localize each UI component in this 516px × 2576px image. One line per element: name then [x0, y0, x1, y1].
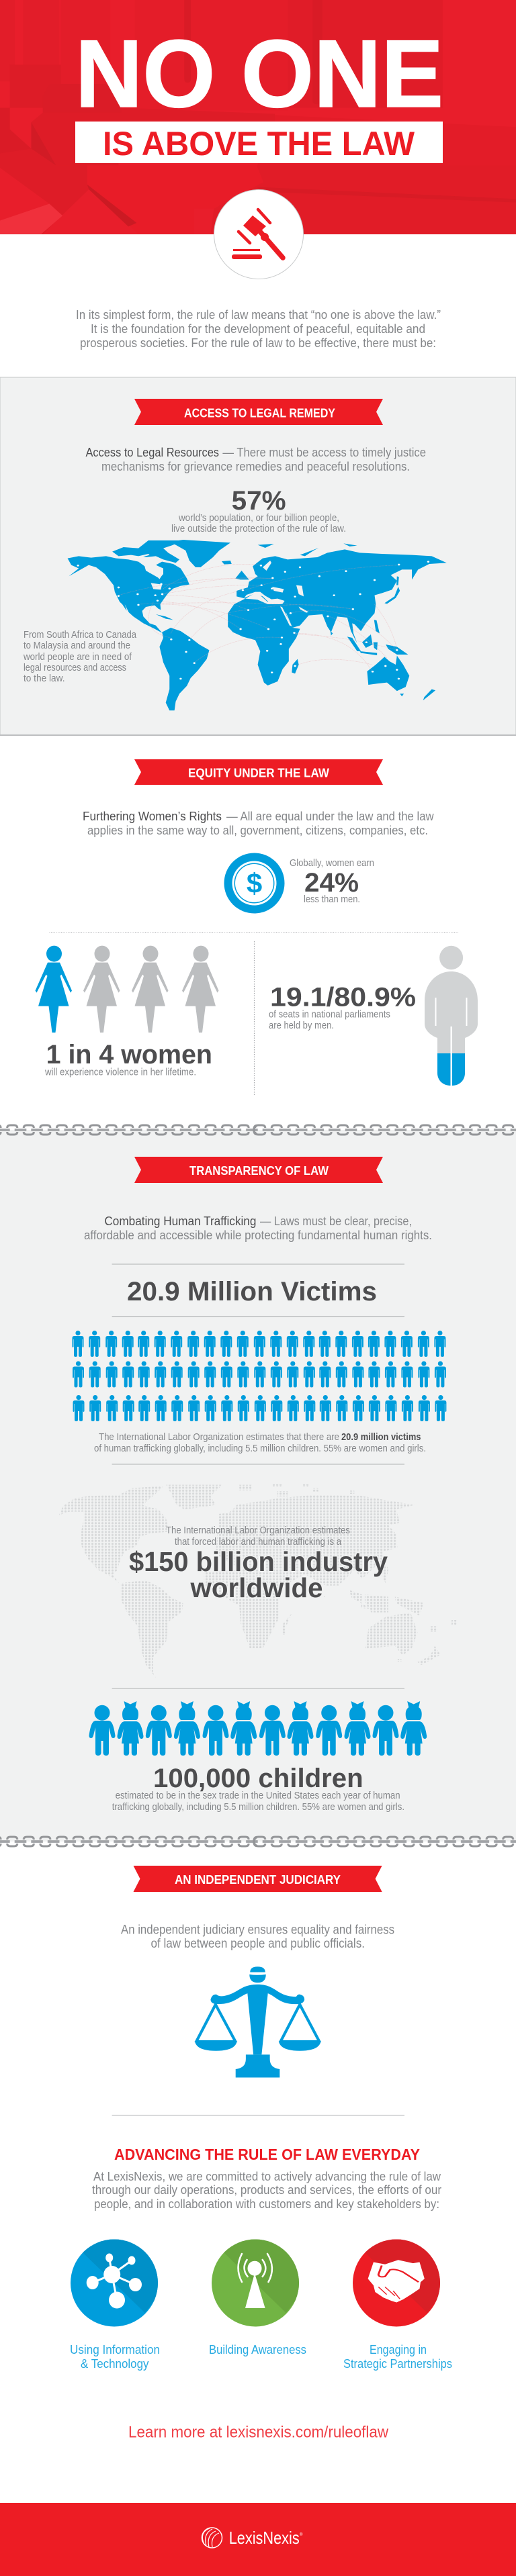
body text: through our daily operations, products and services, the efforts of our [92, 2183, 441, 2197]
section text [84, 1214, 432, 1242]
chain divider top [0, 1124, 516, 1136]
icon: handshake [353, 2240, 440, 2327]
statistic: 57%: 57% [232, 486, 286, 516]
icon: man figure [425, 946, 478, 1086]
caption: victims [94, 1432, 426, 1454]
callout: from South Africa to Canada [23, 630, 137, 684]
label: engaging in strategic partnerships [343, 2343, 452, 2371]
body text [92, 2169, 441, 2211]
heading: ADVANCING THE RULE OF LAW EVERYDAY [114, 2146, 420, 2163]
label: engaging in strategic partnerships: Strategic Partnerships [343, 2357, 452, 2371]
intro text [76, 308, 441, 350]
logo: LexisNexis: ® [300, 2532, 303, 2537]
chain divider bottom [0, 1835, 516, 1848]
label: using information and technology: Using Information [70, 2343, 160, 2356]
statistic: 57% [171, 486, 346, 534]
section text: mechanisms for grievance remedies and peaceful resolutions. [101, 460, 410, 473]
statistic: 100,000 children: 100,000 children [153, 1764, 363, 1793]
text: 150 billion industry: . [324, 1594, 325, 1599]
label: engaging in strategic partnerships: Engaging in [370, 2343, 427, 2356]
intro text: It is the foundation for the development of peaceful, equitable and [91, 322, 425, 336]
banner: transparency of law: TRANSPARENCY OF LAW [189, 1163, 329, 1178]
callout: from South Africa to Canada: From South Africa to Canada [24, 630, 137, 640]
panel: hero header [0, 0, 516, 279]
heading: 20.9 million victims: 20.9 Million Victims [127, 1277, 377, 1306]
link: learn more: Learn more at lexisnexis.com/ruleoflaw [128, 2424, 389, 2442]
caption: victims: The International Labor Organization estimates that there are [99, 1432, 339, 1443]
statistic: 100,000 children: estimated to be in the sex trade in the United States each year of human [116, 1791, 400, 1801]
icon: blind justice scales [195, 1966, 321, 2078]
banner: access to legal remedy [134, 399, 383, 425]
statistic: 57%: world’s population, or four billion people, [178, 513, 339, 524]
panel: advancing the rule of law everyday [70, 2146, 452, 2442]
intro text: prosperous societies. For the rule of law to be effective, there must be: [80, 336, 436, 350]
section text: affordable and accessible while protecting fundamental human rights. [84, 1229, 432, 1242]
statistic: 57%: live outside the protection of the rule of law. [171, 524, 346, 534]
section text: — There must be access to timely justice [222, 446, 426, 459]
children row [89, 1701, 427, 1756]
statistic: 24% [290, 858, 374, 905]
statistic: 19.1/80.9%: of seats in national parliaments [269, 1010, 390, 1020]
section text: — All are equal under the law and the law [226, 810, 435, 823]
panel: an independent judiciary [112, 1866, 404, 2115]
panel background [0, 1130, 516, 1842]
statistic: 24%: Globally, women earn [290, 858, 374, 869]
text: 150 billion industry: The International Labor Organization estimates [166, 1525, 350, 1536]
icon: dollar coin [224, 853, 285, 913]
city dots [77, 561, 429, 679]
section text [83, 810, 435, 837]
statistic: 100,000 children: trafficking globally, including 5.5 million children. 55% are women and girls. [112, 1802, 404, 1813]
callout: from South Africa to Canada: to Malaysia and around the [24, 640, 130, 651]
section text: An independent judiciary ensures equality and fairness [121, 1923, 394, 1938]
people grid [73, 1331, 446, 1421]
panel: transparency of law [0, 1124, 516, 1848]
title: NO ONE: NO ONE [75, 21, 443, 128]
statistic: 24%: less than men. [304, 894, 360, 905]
icon: dollar coin: $ [247, 867, 262, 899]
section text: Furthering Women’s Rights [83, 810, 222, 823]
text: 150 billion industry: worldwide [190, 1572, 322, 1603]
caption: victims: of human trafficking globally, including 5.5 million children. 55% are women and girls. [94, 1443, 426, 1454]
panel: access to legal remedy [0, 377, 516, 736]
panel background [0, 377, 516, 735]
icon: network [71, 2240, 158, 2327]
icon: gavel badge [214, 189, 304, 279]
section text: Access to Legal Resources [86, 446, 219, 459]
statistic: 24%: 24% [304, 868, 359, 898]
statistic: 1 in 4 women: 1 in 4 women [46, 1040, 212, 1069]
callout: from South Africa to Canada: to the law. [24, 673, 64, 684]
text: 150 billion industry: that forced labor and human trafficking is a [175, 1537, 342, 1547]
dotted world map [59, 1484, 457, 1678]
banner: an independent judiciary [133, 1866, 382, 1892]
hero background with red courthouse columns [0, 0, 516, 234]
text: 150 billion industry: $150 billion industry [129, 1546, 388, 1577]
callout: from South Africa to Canada: legal resources and access [24, 663, 126, 673]
banner: transparency of law [134, 1157, 383, 1183]
banner: equity under the law [134, 759, 383, 785]
statistic: 100,000 children [112, 1764, 404, 1813]
trade arcs [118, 564, 399, 671]
logo: LexisNexis: LexisNexis [229, 2528, 300, 2548]
label: using information and technology: & Technology [81, 2357, 149, 2371]
icon: signal tower [212, 2240, 299, 2327]
statistic: 19.1/80.9%: 19.1/80.9% [270, 983, 416, 1012]
callout: from South Africa to Canada: world people are in need of [23, 652, 132, 663]
icon: four women [35, 946, 219, 1033]
statistic: 19.1/80.9%: are held by men. [269, 1020, 334, 1031]
section text [121, 1923, 394, 1951]
section text [86, 446, 426, 473]
banner: an independent judiciary: AN INDEPENDENT JUDICIARY [175, 1872, 341, 1887]
caption: victims: 20.9 million victims [341, 1432, 421, 1443]
statistic: 19.1/80.9% [269, 983, 416, 1031]
section text: — Laws must be clear, precise, [260, 1214, 412, 1228]
banner: access to legal remedy: ACCESS TO LEGAL REMEDY [184, 406, 336, 420]
world map [68, 540, 447, 710]
label: using information and technology [70, 2343, 160, 2371]
logo: LexisNexis [202, 2528, 303, 2548]
panel: equity under the law [35, 759, 478, 1096]
label: building awareness: Building Awareness [209, 2343, 306, 2356]
section text: Combating Human Trafficking [104, 1214, 256, 1228]
statistic: 1 in 4 women: will experience violence in her lifetime. [44, 1067, 196, 1078]
subtitle box: IS ABOVE THE LAW [103, 125, 415, 162]
panel: footer [0, 2503, 516, 2576]
intro text: In its simplest form, the rule of law means that “no one is above the law.” [76, 308, 441, 322]
text: 150 billion industry [129, 1525, 388, 1603]
section text: applies in the same way to all, government, citizens, companies, etc. [87, 824, 428, 837]
banner: equity under the law: EQUITY UNDER THE LAW [188, 765, 329, 780]
body text: people, and in collaboration with customers and key stakeholders by: [94, 2197, 439, 2211]
map water cutouts [125, 554, 308, 626]
section text: of law between people and public officials. [150, 1937, 365, 1951]
body text: At LexisNexis, we are committed to actively advancing the rule of law [93, 2169, 441, 2183]
